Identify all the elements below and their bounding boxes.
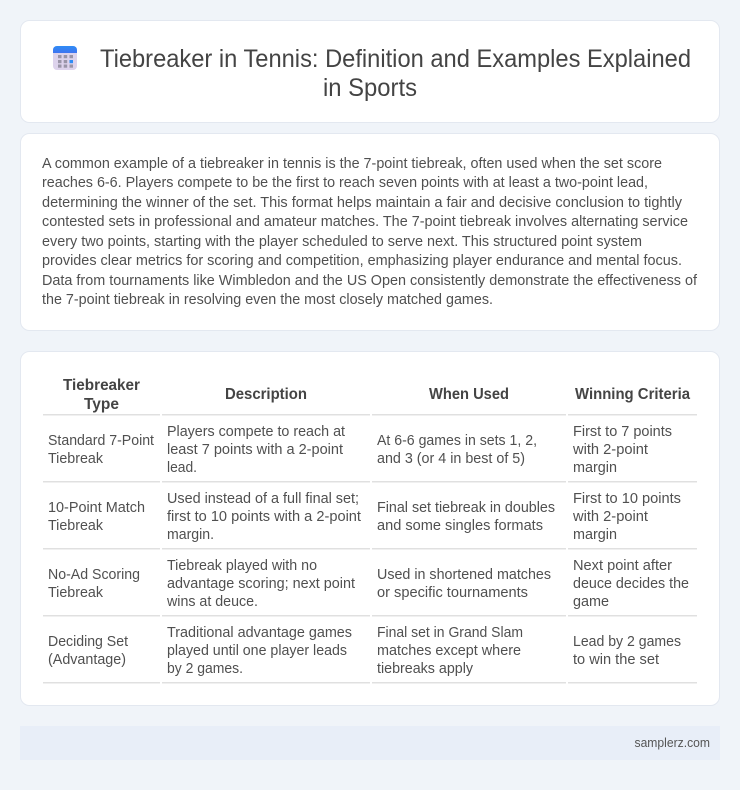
- table row: 10-point match tiebreak: [43, 491, 697, 550]
- table row: 10-point match tiebreak: first to 10 points with a 2-point: [167, 509, 361, 525]
- text block: tiebreak explanation: A common example of a tiebreaker in tennis is the 7-point tiebreak, often used when the set score: [42, 156, 662, 172]
- table row: standard 7-point tiebreak: least 7 points with a 2-point: [167, 442, 343, 458]
- table row: no-ad scoring tiebreak: Tiebreak: [48, 585, 104, 601]
- footer: samplerz.com: [634, 736, 710, 750]
- text block: tiebreak explanation: contested sets in professional and amateur matches. The 7-point tiebreak involves alternating service: [42, 214, 688, 230]
- table row: no-ad scoring tiebreak: deuce decides the: [573, 576, 689, 592]
- table row: no-ad scoring tiebreak: or specific tournaments: [377, 585, 528, 601]
- table row: 10-point match tiebreak: Tiebreak: [48, 518, 104, 534]
- title: [100, 45, 691, 102]
- text block: tiebreak explanation: the 7-point tiebreak in resolving even the most closely matched games.: [42, 292, 493, 308]
- table row: no-ad scoring tiebreak: [43, 558, 697, 616]
- table row: no-ad scoring tiebreak: No-Ad Scoring: [48, 567, 140, 583]
- table row: deciding set (advantage): to win the set: [573, 652, 659, 668]
- table row: deciding set (advantage): by 2 games.: [167, 661, 243, 677]
- panel: explanation paragraph: [20, 134, 720, 330]
- table row: standard 7-point tiebreak: At 6-6 games in sets 1, 2,: [377, 433, 537, 449]
- table row: 10-point match tiebreak: margin.: [167, 527, 214, 543]
- table row: 10-point match tiebreak: 10-Point Match: [48, 500, 145, 516]
- table row: standard 7-point tiebreak: margin: [573, 460, 617, 476]
- table row: 10-point match tiebreak: and some singles formats: [377, 518, 543, 534]
- table row: 10-point match tiebreak: Used instead of a full final set;: [167, 491, 359, 507]
- table row: 10-point match tiebreak: First to 10 points: [573, 491, 681, 507]
- table row: deciding set (advantage): tiebreaks apply: [377, 661, 474, 677]
- panel: title card: [20, 20, 720, 122]
- table row: deciding set (advantage): [43, 625, 697, 684]
- footer: [20, 726, 720, 760]
- table row: standard 7-point tiebreak: and 3 (or 4 in best of 5): [377, 451, 525, 467]
- table row: standard 7-point tiebreak: lead.: [167, 460, 197, 476]
- table header row: Winning Criteria: [575, 386, 690, 403]
- table row: standard 7-point tiebreak: First to 7 points: [573, 424, 672, 440]
- text block: tiebreak explanation: Data from tournaments like Wimbledon and the US Open consistently demonstrate the effectiveness of: [42, 273, 698, 289]
- table row: no-ad scoring tiebreak: advantage scoring; next point: [167, 576, 355, 592]
- table row: no-ad scoring tiebreak: Tiebreak played with no: [167, 558, 317, 574]
- text block: tiebreak explanation: every two points, starting with the player scheduled to serve next. This structured point system: [42, 234, 642, 250]
- table row: 10-point match tiebreak: Final set tiebreak in doubles: [377, 500, 555, 516]
- icon: calendar: [53, 46, 77, 70]
- table row: deciding set (advantage): Final set in Grand Slam: [377, 625, 523, 641]
- table row: standard 7-point tiebreak: Standard 7-Point: [48, 433, 154, 449]
- table row: standard 7-point tiebreak: with 2-point: [572, 442, 648, 458]
- table row: deciding set (advantage): matches except where: [377, 643, 521, 659]
- table row: standard 7-point tiebreak: [43, 424, 697, 482]
- table row: no-ad scoring tiebreak: Next point after: [573, 558, 672, 574]
- table row: deciding set (advantage): Lead by 2 games: [573, 634, 681, 650]
- table row: deciding set (advantage): Deciding Set: [48, 634, 128, 650]
- text block: tiebreak explanation: determining the winner of the set. This format helps maintain a fair and decisive conclusion to tightly: [42, 195, 683, 211]
- title: Tiebreaker in Tennis: Definition and Examples Explained: [100, 45, 691, 73]
- table row: deciding set (advantage): Traditional advantage games: [167, 625, 352, 641]
- table row: no-ad scoring tiebreak: Used in shortened matches: [377, 567, 551, 583]
- table header row: Description: [225, 386, 307, 403]
- table row: deciding set (advantage): played until one player leads: [167, 643, 347, 659]
- table header row: [43, 377, 697, 416]
- text block: tiebreak explanation: reaches 6-6. Players compete to be the first to reach seven points with at least a two-point lead,: [42, 175, 648, 191]
- table row: 10-point match tiebreak: margin: [573, 527, 617, 543]
- table row: deciding set (advantage): (Advantage): [48, 652, 126, 668]
- table row: standard 7-point tiebreak: Tiebreak: [48, 451, 104, 467]
- title: in Sports: [323, 74, 417, 102]
- table row: 10-point match tiebreak: with 2-point: [572, 509, 648, 525]
- table row: no-ad scoring tiebreak: game: [573, 594, 609, 610]
- text block: tiebreak explanation: provides clear metrics for scoring and competition, emphasizing player endurance and mental focus.: [42, 253, 682, 269]
- table header row: When Used: [429, 386, 509, 403]
- panel: comparison table: [20, 352, 720, 706]
- table row: no-ad scoring tiebreak: wins at deuce.: [166, 594, 258, 610]
- table header row: Tiebreaker: [63, 377, 140, 394]
- table row: standard 7-point tiebreak: Players compete to reach at: [167, 424, 345, 440]
- table header row: Type: [84, 396, 119, 413]
- text block: tiebreak explanation: [42, 156, 698, 308]
